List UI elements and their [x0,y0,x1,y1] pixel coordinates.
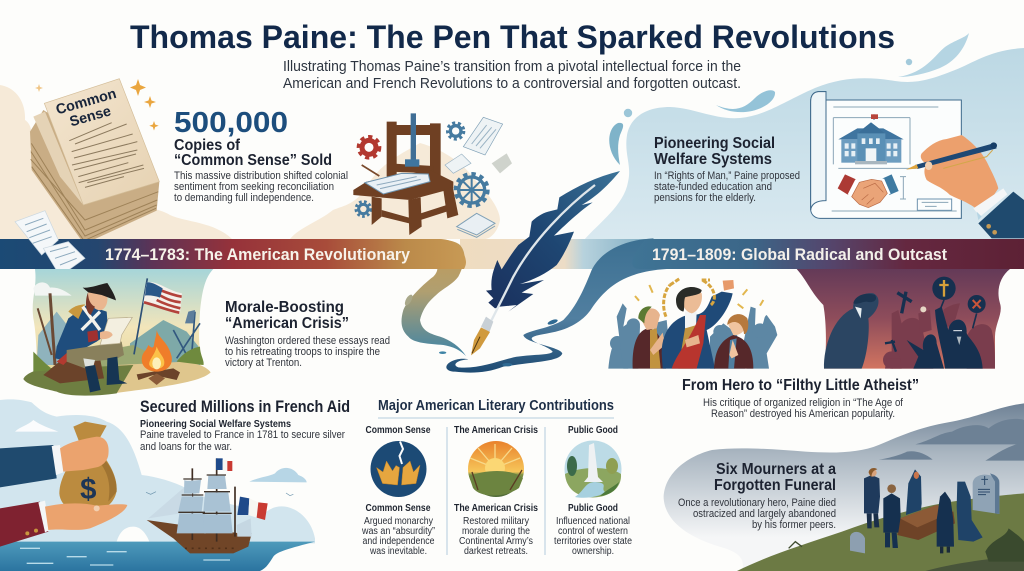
heading: morale-boosting American Crisis: victory at Trenton. [225,357,302,369]
heading: six mourners: Once a revolutionary hero, Paine died [678,497,836,509]
panel: major American literary contributions [361,398,632,557]
heading: morale-boosting American Crisis: Washington ordered these essays read [225,335,390,347]
column: Public Good: control of western [558,526,628,537]
column: The American Crisis: morale during the [462,526,530,537]
outcast scene [797,269,1010,369]
column: The American Crisis: Continental Army’s [459,536,533,547]
heading: pioneering social welfare: Pioneering Social [654,135,775,152]
heading: pioneering social welfare: state-funded education and [654,181,772,193]
stack of Common Sense pamphlets [30,79,159,244]
panel heading: Major American Literary Contributions [378,398,614,414]
column: Public Good: territories over state [554,536,632,547]
pamphlet title: Common [54,86,118,118]
heading: secured millions: Secured Millions in French Aid [140,398,350,416]
ink swirls under pen [400,238,667,373]
stat: 500,000 copies: Copies of [174,137,241,154]
blue welfare background blob [584,33,1024,240]
pamphlet title: Sense [68,103,113,130]
mourners, coffin and gravestones [850,468,999,553]
tan cloud background left [0,85,500,239]
scene: French aid money bag and ship [0,399,315,571]
banner: American Revolutionary: 1774–1783: The American Revolutionary [105,246,411,264]
heading: morale-boosting American Crisis [225,299,390,369]
heading: morale-boosting American Crisis: Morale-Boosting [225,299,344,316]
subtitle [283,58,741,92]
heading: secured millions [140,398,350,453]
icon: quill pen [471,171,620,355]
heading: six mourners: Six Mourners at a [716,461,836,478]
column: Public Good: Influenced national [556,516,630,527]
column: The American Crisis: darkest retreats. [464,546,528,557]
title: Thomas Paine: The Pen That Sparked Revolutions [130,19,895,55]
heading: six mourners [678,461,836,531]
stat: 500,000 copies: sentiment from seeking reconciliation [174,181,334,193]
column: Public Good: ownership. [572,546,614,557]
banner: American Revolutionary [0,239,466,269]
column: Common Sense: was inevitable. [369,546,427,557]
heading: from hero to filthy little atheist: His critique of organized religion in “The Age of [703,397,904,409]
heading: pioneering social welfare: In “Rights of Man,” Paine proposed [654,170,800,182]
banner tail centre [460,239,650,269]
banner: Global Radical and Outcast [632,239,1024,269]
heading: secured millions: and loans for the war. [140,441,232,453]
heading: from hero to filthy little atheist: From Hero to “Filthy Little Atheist” [682,377,919,394]
column: Common Sense: was an “absurdity” [361,526,435,537]
heading: secured millions: Pioneering Social Welfare Systems [140,418,291,430]
heading: six mourners: by his former peers. [752,519,836,531]
heading: six mourners: ostracized and largely abandoned [693,508,836,520]
sparkles [35,79,159,130]
banner: Global Radical and Outcast: 1791–1809: Global Radical and Outcast [652,246,947,264]
column: Common Sense: Argued monarchy [364,516,433,527]
column: The American Crisis [454,425,538,557]
column: Public Good [554,425,632,557]
coffin [897,505,955,540]
loose pages over banner [15,211,85,276]
heading: secured millions: Paine traveled to France in 1781 to secure silver [140,429,345,441]
scene: hero crowd and outcast panels [608,269,1010,369]
heading: pioneering social welfare: pensions for the elderly. [654,192,756,204]
scene: soldier at campfire [23,269,213,396]
stat: 500,000 copies: to demanding full independence. [174,192,314,204]
heading: pioneering social welfare [654,135,800,204]
stat: 500,000 copies: This massive distribution shifted colonial [174,170,348,182]
column: Public Good: Public Good [568,425,618,436]
scene: funeral landscape [664,403,1024,571]
icon: blueprint with building, handshake and hand with pen [811,92,1024,238]
column: Common Sense: Common Sense [366,503,431,514]
subtitle: Illustrating Thomas Paine’s transition from a pivotal intellectual force in the [283,58,741,75]
heading: morale-boosting American Crisis: “American Crisis” [225,315,349,332]
stat: 500,000 copies: 500,000 [174,107,288,139]
subtitle: American and French Revolutions to a controversial and forgotten outcast. [283,75,741,92]
icon: printing press with gears [353,113,512,237]
mourner figures [864,468,983,553]
heading: pioneering social welfare: Welfare Systems [654,151,772,168]
heading: six mourners: Forgotten Funeral [714,477,836,494]
column: The American Crisis: Restored military [463,516,529,527]
column: The American Crisis: The American Crisis [454,503,538,514]
column: Public Good: Public Good [568,503,618,514]
heading: from hero to filthy little atheist: Reason” destroyed his American popularity. [711,408,895,420]
stat: 500,000 copies: “Common Sense” Sold [174,152,332,169]
column: Common Sense: Common Sense [366,425,431,436]
pamphlet title [54,86,123,133]
column: The American Crisis: The American Crisis [454,425,538,436]
heading: morale-boosting American Crisis: to his retreating troops to inspire the [225,346,380,358]
column: Common Sense [361,425,435,557]
hero crowd scene [608,278,777,369]
gravestones [850,473,999,553]
fist gripping the bag [60,437,109,472]
stat: 500,000 copies [174,107,348,204]
heading: from hero to filthy little atheist [682,377,919,420]
scene: French aid money bag and ship: $ [80,473,96,506]
column: Common Sense: and independence [362,536,435,547]
